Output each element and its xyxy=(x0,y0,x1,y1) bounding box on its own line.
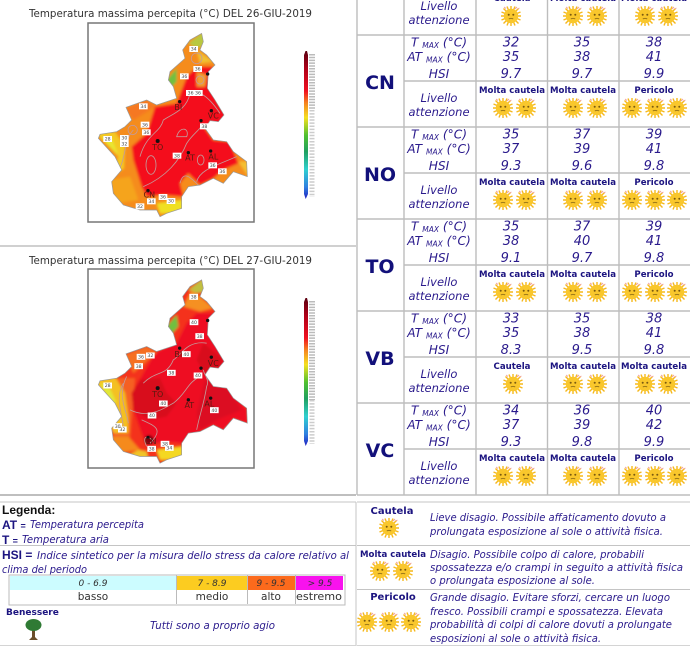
table row: VB: attenzione xyxy=(408,381,470,395)
panel: legend right xyxy=(357,502,690,646)
table row: VB: 38 xyxy=(646,312,662,326)
legend heading: Legenda: xyxy=(2,503,55,517)
contour value labels: 32 xyxy=(137,204,143,210)
table row: NO: T xyxy=(411,128,418,142)
level: molta cautela xyxy=(360,549,683,587)
contour value labels: 36 36 xyxy=(188,91,201,97)
table row: VB: HSI xyxy=(429,343,450,357)
table row: NO: (°C) xyxy=(439,128,467,142)
benessere heading: Benessere xyxy=(6,608,59,618)
table row: VB: 9.5 xyxy=(572,343,592,358)
table row: cut-off top row xyxy=(408,0,687,27)
table row: VB: 35 xyxy=(503,326,519,341)
contour value labels: 38 xyxy=(162,441,168,447)
contour value labels: 38 xyxy=(136,364,142,370)
AT definition: Temperatura percepita xyxy=(30,519,144,531)
table row: CN: 38 xyxy=(646,36,662,50)
table row: VC: (°C) xyxy=(439,404,467,418)
province letters: AL xyxy=(208,152,219,161)
table row: VC: 36 xyxy=(574,404,590,418)
table row: VC: 42 xyxy=(646,418,662,433)
table row: NO: 9.3 xyxy=(501,159,521,174)
table row: VC: Pericolo xyxy=(634,454,674,464)
table row: VB: VB xyxy=(365,348,395,370)
table row: TO: attenzione xyxy=(408,289,470,303)
table row: VB: Cautela xyxy=(494,362,531,372)
level: pericolo: probabilità di colpi di calore dovuti a prolungate xyxy=(429,619,672,631)
table row: TO: Molta cautela xyxy=(479,270,545,280)
contour value labels xyxy=(103,46,227,210)
table row: VC: T xyxy=(411,404,418,418)
level: molta cautela: o prolungata esposizione al sole. xyxy=(430,575,595,587)
province letters xyxy=(144,103,219,199)
table row: NO: MAX xyxy=(422,133,440,142)
table row: VB: Livello xyxy=(421,367,457,381)
table row: VB: 38 xyxy=(574,326,590,341)
city dots xyxy=(146,319,213,439)
map frame xyxy=(88,23,254,222)
level: pericolo: fresco. Possibili crampi e spossatezza. Elevata xyxy=(430,606,663,618)
table row: VB: (°C) xyxy=(439,312,467,326)
level: cautela: Lieve disagio. Possibile affaticamento dovuto a xyxy=(430,512,666,524)
table row: CN: MAX xyxy=(422,41,440,50)
contour value labels xyxy=(103,294,219,452)
table row: NO: Pericolo xyxy=(634,178,674,188)
contour value labels: 38 xyxy=(191,294,197,300)
table row: CN: 32 xyxy=(503,36,519,50)
table row: NO xyxy=(364,128,687,211)
province letters: AT xyxy=(185,154,195,163)
benessere text: Tutti sono a proprio agio xyxy=(150,620,275,632)
table row: VB: 9.8 xyxy=(644,343,664,358)
HSI scale table: medio xyxy=(196,591,228,603)
HSI scale table xyxy=(9,575,345,605)
contour value labels: 38 xyxy=(197,334,203,340)
table row: VB: 35 xyxy=(574,312,590,326)
table row: VB: MAX xyxy=(422,317,440,326)
table row: VB: (°C) xyxy=(443,326,471,340)
table row: TO: AT xyxy=(407,234,422,248)
contour value labels: 40 xyxy=(191,320,197,326)
HSI scale table: 9 - 9.5 xyxy=(256,579,286,589)
contour value labels: 38 xyxy=(149,446,155,452)
panel: legend left xyxy=(0,495,356,646)
table row: CN: HSI xyxy=(429,67,450,81)
province letters: TO xyxy=(151,143,163,152)
province letters: AL xyxy=(204,399,215,408)
contour value labels: 36 xyxy=(160,195,166,201)
table row: TO: 41 xyxy=(646,234,662,249)
table row: VB: 33 xyxy=(503,312,519,326)
level: pericolo xyxy=(357,592,672,645)
table row: TO: TO xyxy=(365,256,395,278)
contour value labels: 32 xyxy=(119,427,125,433)
HSI scale table: basso xyxy=(78,591,108,603)
table row: TO: 37 xyxy=(574,220,591,234)
table row: CN: 35 xyxy=(574,36,590,50)
AT definition: AT = xyxy=(2,518,26,532)
province letters: CN xyxy=(145,437,156,446)
table row: TO: Molta cautela xyxy=(550,270,616,280)
contour value labels: 38 xyxy=(168,370,174,376)
HSI scale table: > 9.5 xyxy=(308,579,333,589)
contour value labels: 40 xyxy=(160,401,166,407)
table row: CN xyxy=(365,36,687,119)
table row: NO: 41 xyxy=(646,142,662,157)
table row: VB: MAX xyxy=(426,332,444,340)
province letters: AT xyxy=(184,401,194,410)
AT definition xyxy=(2,518,144,532)
table row: VB: AT xyxy=(407,326,422,340)
table row: NO: Molta cautela xyxy=(479,178,545,188)
table row: VB: 8.3 xyxy=(501,343,521,358)
contour value labels: 34 xyxy=(148,199,154,205)
table row: NO: (°C) xyxy=(443,142,471,156)
table row: TO: HSI xyxy=(429,251,450,265)
table row: TO: 9.8 xyxy=(644,251,664,266)
contour value labels: 36 xyxy=(138,354,144,360)
contour value labels: 30 xyxy=(121,136,127,142)
table row: VC: 39 xyxy=(574,418,590,433)
table row: TO: 35 xyxy=(503,220,519,234)
map title 27 June: Temperatura massima percepita (°C) DEL 27-GIU-2019 xyxy=(28,255,312,267)
contour value labels: 30 xyxy=(115,424,121,430)
HSI scale table: estremo xyxy=(296,591,342,603)
level: pericolo: Pericolo xyxy=(370,592,416,603)
table row: VB: T xyxy=(411,312,418,326)
table row: NO: HSI xyxy=(429,159,450,173)
table row: CN: Livello xyxy=(421,91,457,105)
contour value labels: 36 xyxy=(219,169,225,175)
contour value labels: 34 xyxy=(166,445,172,451)
table row: TO: 9.7 xyxy=(572,251,593,266)
province letters: BI xyxy=(174,350,182,359)
table row: VC: VC xyxy=(366,440,394,462)
choropleth map of Piemonte xyxy=(93,276,253,466)
table row: cut-off top row: attenzione xyxy=(408,13,470,27)
T definition: T = xyxy=(2,533,18,547)
table row: VC: Molta cautela xyxy=(550,454,616,464)
table row: CN: 41 xyxy=(646,50,662,65)
contour value labels: 32 xyxy=(147,353,153,359)
province letters xyxy=(145,350,219,446)
HSI definition: Indice sintetico per la misura dello stress da calore relativo al xyxy=(37,550,349,562)
table row: TO: (°C) xyxy=(439,220,467,234)
table row: NO: 37 xyxy=(574,128,591,142)
table row: CN: MAX xyxy=(426,56,444,64)
colour scale xyxy=(304,51,312,199)
contour value labels: 40 xyxy=(195,373,201,379)
table row: VC: HSI xyxy=(429,435,450,449)
contour value labels: 36 xyxy=(195,67,201,73)
table row: NO: attenzione xyxy=(408,197,470,211)
level: cautela: Cautela xyxy=(371,506,413,517)
table grid xyxy=(357,0,690,495)
level: molta cautela: Molta cautela xyxy=(360,550,426,560)
table row: VC: 40 xyxy=(646,404,662,418)
contour value labels: 36 xyxy=(143,130,149,136)
province letters: TO xyxy=(151,390,163,399)
province letters: VC xyxy=(208,359,219,368)
choropleth map of Piemonte xyxy=(93,30,253,220)
table row: NO: 39 xyxy=(574,142,590,157)
province letters: BI xyxy=(174,103,182,112)
table row: CN: 9.7 xyxy=(501,67,522,82)
table row: CN: Pericolo xyxy=(634,86,674,96)
table row: TO xyxy=(365,220,687,303)
contour value labels: 36 xyxy=(142,122,148,128)
table row: NO: 39 xyxy=(646,128,662,142)
table row: CN: AT xyxy=(407,50,422,64)
table row: NO: 35 xyxy=(503,128,519,142)
table row: CN: 35 xyxy=(503,50,519,65)
icon: tree xyxy=(26,619,42,640)
table row: TO: T xyxy=(411,220,418,234)
table row: NO: AT xyxy=(407,142,422,156)
table row: TO: (°C) xyxy=(443,234,471,248)
table row: CN: 9.7 xyxy=(572,67,593,82)
table row: VC xyxy=(366,404,687,487)
table row: VB: Molta cautela xyxy=(550,362,616,372)
table row: VC: 9.3 xyxy=(501,435,521,450)
level: cautela xyxy=(371,506,666,538)
contour value labels: 40 xyxy=(211,408,217,414)
table row: VC: MAX xyxy=(422,409,440,418)
HSI scale table: 7 - 8.9 xyxy=(197,579,227,589)
table row: VC: attenzione xyxy=(408,473,470,487)
table row: VC: 9.8 xyxy=(572,435,592,450)
table row: TO: MAX xyxy=(422,225,440,234)
table row: TO: Livello xyxy=(421,275,457,289)
province letters: CN xyxy=(144,190,155,199)
HSI definition: clima del periodo xyxy=(2,564,87,576)
table row: VC: MAX xyxy=(426,424,444,432)
level: pericolo: esposizioni al sole o attività fisica. xyxy=(430,633,601,645)
contour value labels: 30 xyxy=(168,199,174,205)
table row: NO: MAX xyxy=(426,148,444,156)
table row: TO: 39 xyxy=(646,220,662,234)
table row: CN: (°C) xyxy=(443,50,471,64)
table row: CN: Molta cautela xyxy=(479,86,545,96)
HSI scale table: alto xyxy=(261,591,281,603)
map title 26 June: Temperatura massima percepita (°C) DEL 26-GIU-2019 xyxy=(28,8,312,20)
contour value labels: 28 xyxy=(105,137,111,143)
map frame xyxy=(88,269,254,468)
table row: TO: Pericolo xyxy=(634,270,674,280)
HSI definition xyxy=(2,548,349,576)
table row: VB xyxy=(365,312,687,395)
contour value labels: 34 xyxy=(191,47,197,53)
table row: VB: 41 xyxy=(646,326,662,341)
contour value labels: 36 xyxy=(181,74,187,80)
contour value labels: 34 xyxy=(140,104,146,110)
table row: NO: NO xyxy=(364,164,396,186)
colour scale xyxy=(304,298,312,446)
contour value labels: 38 xyxy=(201,124,207,130)
table row: CN: 38 xyxy=(574,50,590,65)
table row: TO: 38 xyxy=(503,234,519,249)
HSI scale table: 0 - 6.9 xyxy=(78,579,108,589)
level: molta cautela: Disagio. Possibile colpo di calore, probabili xyxy=(430,549,644,561)
contour value labels: 28 xyxy=(105,383,111,389)
table row: VC: AT xyxy=(407,418,422,432)
level: molta cautela: spossatezza e/o crampi in seguito a attività fisica xyxy=(430,562,683,574)
table row: CN: Molta cautela xyxy=(550,86,616,96)
table row: VB: Molta cautela xyxy=(621,362,687,372)
city dots xyxy=(146,72,213,192)
table row: NO: 37 xyxy=(503,142,520,157)
table row: VC: 9.9 xyxy=(644,435,664,450)
T definition xyxy=(2,533,109,547)
table row: CN: (°C) xyxy=(439,36,467,50)
table row: TO: MAX xyxy=(426,240,444,248)
table row: CN: CN xyxy=(365,72,395,94)
table row: VC: Molta cautela xyxy=(479,454,545,464)
contour value labels: 40 xyxy=(149,413,155,419)
province letters: VC xyxy=(208,111,219,120)
table row: TO: 40 xyxy=(574,234,590,249)
table row: NO: Livello xyxy=(421,183,457,197)
table row: VC: 37 xyxy=(503,418,520,433)
panel: map 26 June xyxy=(28,8,312,222)
contour value labels: 40 xyxy=(183,352,189,358)
table row: NO: 9.6 xyxy=(572,159,592,174)
table row: VC: Livello xyxy=(421,459,457,473)
level: pericolo: Grande disagio. Evitare sforzi, cercare un luogo xyxy=(430,592,670,604)
table row: VC: 34 xyxy=(503,404,519,418)
T definition: Temperatura aria xyxy=(22,534,109,546)
table row: NO: 9.8 xyxy=(644,159,664,174)
contour value labels: 32 xyxy=(121,142,127,148)
table row: CN: T xyxy=(411,36,418,50)
table row: VC: (°C) xyxy=(443,418,471,432)
contour value labels: 36 xyxy=(210,163,216,169)
table row: NO: Molta cautela xyxy=(550,178,616,188)
panel: map 27 June xyxy=(28,255,312,468)
divider between maps xyxy=(0,245,356,247)
HSI definition: HSI = xyxy=(2,548,32,562)
contour value labels: 38 xyxy=(174,153,180,159)
level: cautela: prolungata esposizione al sole o attività fisica. xyxy=(429,526,663,538)
table row: TO: 9.1 xyxy=(501,251,521,266)
table row: CN: 9.9 xyxy=(644,67,664,82)
table row: CN: attenzione xyxy=(408,105,470,119)
